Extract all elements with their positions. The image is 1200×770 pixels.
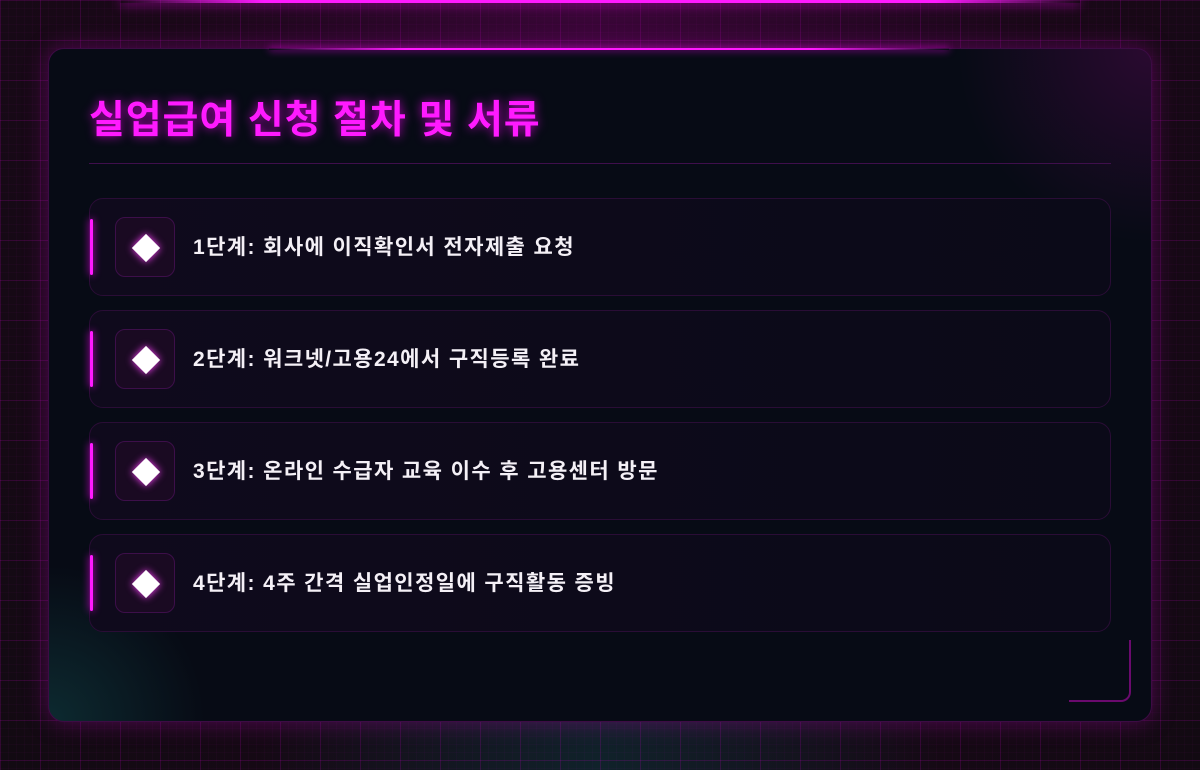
- icon: diamond: [115, 553, 175, 613]
- step 4: [89, 534, 1111, 632]
- text: step 1: 1단계: 회사에 이직확인서 전자제출 요청: [193, 236, 575, 259]
- corner accent: [1069, 640, 1131, 702]
- icon: diamond: [115, 329, 175, 389]
- icon: diamond: [115, 441, 175, 501]
- step 3: [89, 422, 1111, 520]
- step 1: [89, 198, 1111, 296]
- text: step 2: 2단계: 워크넷/고용24에서 구직등록 완료: [193, 348, 580, 371]
- text: step 3: 3단계: 온라인 수급자 교육 이수 후 고용센터 방문: [193, 460, 659, 483]
- icon: diamond: [115, 217, 175, 277]
- text: step 4: 4단계: 4주 간격 실업인정일에 구직활동 증빙: [193, 572, 616, 595]
- title: 실업급여 신청 절차 및 서류: [89, 99, 541, 142]
- step 2: [89, 310, 1111, 408]
- top glow line: [120, 0, 1080, 3]
